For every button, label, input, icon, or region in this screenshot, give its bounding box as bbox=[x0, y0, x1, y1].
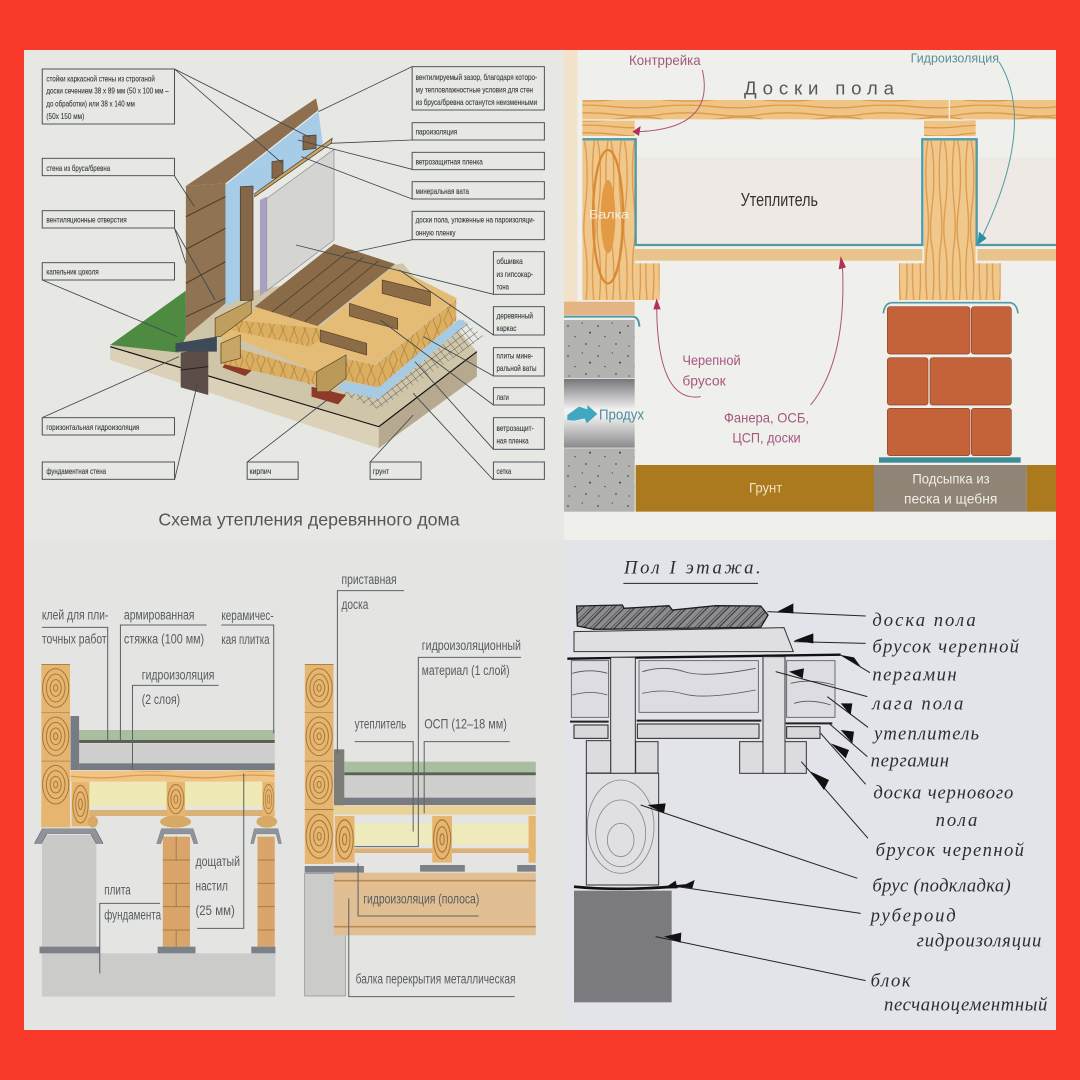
labels: right section: ОСП (12–18 мм) bbox=[424, 716, 507, 731]
label: vapor barrier: пароизоляция bbox=[416, 127, 457, 137]
foundation wall bbox=[176, 337, 217, 395]
left section bbox=[34, 664, 282, 997]
labels: hand-written: брус (подкладка) bbox=[872, 876, 1011, 897]
sand and gravel bed bbox=[874, 465, 1027, 512]
right section bbox=[305, 664, 536, 996]
labels: right section: приставная bbox=[342, 571, 397, 587]
label: floor boards bbox=[412, 211, 544, 240]
insulation bbox=[636, 157, 1056, 246]
insulation cells bbox=[571, 661, 835, 717]
label: foundation wall: фундаментная стена bbox=[46, 466, 106, 476]
foundation left bbox=[34, 828, 282, 997]
labels: hand-written: гидроизоляции bbox=[917, 931, 1041, 952]
beams bbox=[582, 141, 976, 300]
label: vapor barrier bbox=[412, 123, 544, 140]
cranial beam plank bbox=[574, 628, 793, 652]
leader arrows bbox=[641, 603, 870, 981]
pier waterproofing bbox=[879, 303, 1021, 463]
floor boards bbox=[582, 100, 1056, 119]
gypsum sheathing bbox=[260, 149, 334, 296]
label: wooden frame bbox=[493, 307, 544, 335]
labels: left section: керамичес- bbox=[221, 607, 274, 623]
label: brick: кирпич bbox=[250, 466, 271, 476]
label: insulation: Утеплитель bbox=[741, 189, 818, 210]
soil: Грунт bbox=[749, 480, 783, 496]
labels: hand-written: песчаноцементный bbox=[884, 995, 1048, 1016]
labels: right section: материал (1 слой) bbox=[422, 662, 510, 678]
label: horizontal waterproofing bbox=[42, 418, 175, 435]
label: ventilated gap: му тепловлажностные условия для стен bbox=[416, 85, 533, 95]
label: gypsum sheathing: тона bbox=[497, 281, 509, 291]
labels: right section: гидроизоляция (полоса) bbox=[363, 891, 479, 906]
mineral wool block bbox=[220, 267, 457, 387]
label: vents bbox=[42, 211, 175, 228]
label: mineral wool slabs: плиты мине- bbox=[497, 351, 533, 361]
label: drip edge: капельник цоколя bbox=[46, 266, 99, 276]
bricks bbox=[222, 360, 346, 404]
label: cranial bar with arrow: Черепной bbox=[682, 352, 741, 368]
counter rails bbox=[582, 121, 976, 136]
ground slab bbox=[110, 263, 477, 448]
parchment line top bbox=[567, 655, 841, 659]
labels: left section: (2 слоя) bbox=[142, 691, 180, 707]
label: mineral wool slabs bbox=[493, 348, 544, 376]
heading: floor boards: Доски пола bbox=[744, 77, 895, 98]
label: plywood OSB with arrow bbox=[724, 256, 846, 446]
panel: insulation scheme of a wooden house bbox=[24, 50, 564, 540]
labels: hand-written: рубероид bbox=[869, 906, 956, 927]
floor boards bbox=[255, 244, 395, 326]
labels: hand-written: пергамин bbox=[872, 665, 957, 686]
wall edge strip bbox=[564, 50, 577, 303]
label: log wall bbox=[42, 158, 175, 176]
joists bbox=[611, 657, 785, 773]
blue wall membrane bbox=[225, 112, 323, 307]
label: floor boards: доски пола, уложенные на пароизоляци- bbox=[416, 215, 535, 225]
vent: Продух bbox=[599, 407, 645, 423]
label: mineral wool: минеральная вата bbox=[416, 186, 469, 196]
heading: scheme title: Схема утепления деревянного дома bbox=[158, 510, 460, 529]
log wall right bbox=[305, 664, 334, 864]
sand and gravel bed: песка и щебня bbox=[904, 490, 997, 506]
label: wooden frame: каркас bbox=[497, 323, 517, 333]
label: waterproofing with arrow bbox=[911, 51, 1014, 245]
leader lines bbox=[42, 67, 493, 480]
labels: right section: утеплитель bbox=[355, 716, 406, 731]
grass bbox=[110, 291, 186, 353]
label: drip edge bbox=[42, 263, 175, 280]
labels: hand-written: блок bbox=[871, 971, 911, 992]
label: wind film: ная пленка bbox=[497, 435, 529, 445]
label: wall studs bbox=[42, 69, 175, 124]
plank subfloor bbox=[635, 249, 1056, 261]
soil bbox=[636, 465, 1056, 512]
labels: left section: точных работ bbox=[42, 631, 107, 646]
label: plywood OSB with arrow: ЦСП, доски bbox=[732, 430, 801, 446]
label: gypsum sheathing: обшивка bbox=[497, 256, 523, 266]
label: ventilated gap bbox=[412, 67, 544, 110]
label: mineral wool bbox=[412, 182, 544, 199]
labels: left section: (25 мм) bbox=[196, 902, 235, 918]
label: soil bbox=[370, 462, 421, 479]
labels: right section: балка перекрытия металлическая bbox=[356, 971, 515, 986]
joists and insulation left bbox=[72, 782, 277, 828]
mesh bbox=[341, 320, 484, 409]
label: plywood OSB with arrow: Фанера, ОСБ, bbox=[724, 409, 809, 425]
sand and gravel bed: Подсыпка из bbox=[912, 470, 990, 486]
label: wall studs: стойки каркасной стены из строганой bbox=[46, 74, 155, 84]
label: cranial bar with arrow: брусок bbox=[682, 372, 727, 388]
label: wooden frame: деревянный bbox=[497, 311, 533, 321]
labels: hand-written: доска пола bbox=[872, 610, 976, 631]
wind membrane bbox=[337, 319, 468, 399]
labels: hand-written: брусок черепной bbox=[876, 840, 1025, 861]
panel: floor cross-section with beams bbox=[564, 50, 1056, 540]
label: mineral wool slabs: ральной ваты bbox=[497, 363, 536, 373]
wall studs bbox=[240, 135, 332, 301]
tile layers left bbox=[70, 716, 275, 782]
label: joists: лаги bbox=[497, 392, 509, 402]
labels: right section bbox=[342, 571, 521, 986]
vent bbox=[564, 379, 645, 448]
cranial bars bbox=[635, 263, 1001, 300]
labels: left section: фундамента bbox=[104, 907, 161, 922]
labels: hand-written: пола bbox=[936, 810, 977, 831]
hatched floor boards bbox=[577, 605, 768, 629]
label: windproof film bbox=[412, 152, 544, 170]
tile layers right bbox=[334, 749, 536, 815]
metal beam and foundation right bbox=[305, 866, 536, 996]
label: windproof film: ветрозащитная пленка bbox=[416, 156, 483, 166]
label: floor boards: онную пленку bbox=[416, 227, 456, 237]
labels: left section: плита bbox=[104, 882, 131, 898]
label: counter rail with arrow bbox=[629, 52, 704, 136]
labels: hand-written: доска чернового bbox=[873, 782, 1013, 803]
label: soil: грунт bbox=[373, 466, 389, 476]
labels: right section: доска bbox=[342, 596, 369, 612]
label: waterproofing with arrow: Гидроизоляция bbox=[911, 51, 999, 66]
labels: hand-written: брусок черепной bbox=[872, 637, 1020, 658]
wooden frame bbox=[215, 280, 430, 392]
label: mesh bbox=[493, 462, 544, 479]
leader lines bbox=[42, 591, 521, 997]
joists and insulation right bbox=[335, 816, 536, 872]
label: joists bbox=[493, 388, 544, 405]
labels: hand-written: утеплитель bbox=[872, 723, 979, 744]
label: horizontal waterproofing: горизонтальная гидроизоляция bbox=[46, 422, 140, 432]
labels: left section: кая плитка bbox=[221, 631, 270, 647]
label: mesh: сетка bbox=[497, 466, 511, 476]
labels: hand-written bbox=[869, 610, 1048, 1016]
label: wall studs: до обработки) или 38 x 140 мм bbox=[46, 98, 135, 108]
labels: left section: стяжка (100 мм) bbox=[124, 631, 204, 646]
label: vents: вентиляционные отверстия bbox=[46, 215, 127, 225]
waterproofing roll bbox=[574, 885, 692, 889]
label: ventilated gap: вентилируемый зазор, благодаря которо- bbox=[416, 72, 537, 82]
log wall bbox=[186, 98, 318, 337]
rough boards and lower parchment bbox=[570, 721, 832, 738]
sand cement block bbox=[574, 891, 672, 1002]
panel: hand-drawn first floor section bbox=[564, 540, 1056, 1030]
labels: hand-written: пергамин bbox=[871, 751, 949, 772]
panel: cross-sections with screed and tile bbox=[24, 540, 564, 1030]
labels: left section: гидроизоляция bbox=[142, 667, 214, 682]
label: cranial bar with arrow bbox=[653, 298, 741, 397]
label: gypsum sheathing bbox=[493, 252, 544, 294]
foundation left bbox=[564, 302, 639, 512]
labels: left section: армированная bbox=[124, 607, 194, 622]
labels: hand-written: лага пола bbox=[871, 693, 963, 714]
timber pad bbox=[586, 773, 659, 885]
log wall left bbox=[41, 664, 70, 827]
labels: right section: гидроизоляционный bbox=[422, 637, 521, 653]
label: wind film: ветрозащит- bbox=[497, 423, 534, 433]
cranial bars bbox=[586, 741, 806, 773]
waterproofing lines bbox=[582, 139, 1056, 245]
label: log wall: стена из бруса/бревна bbox=[46, 163, 110, 173]
label: foundation wall bbox=[42, 462, 175, 479]
labels: left section: настил bbox=[196, 878, 228, 894]
label: wall studs: (50x 150 мм) bbox=[46, 111, 84, 121]
heading: first floor: Пол I этажа. bbox=[623, 557, 761, 578]
label: beam: Балка bbox=[589, 207, 629, 221]
label: brick bbox=[247, 462, 298, 479]
labels: left section: дощатый bbox=[196, 853, 240, 869]
label: wind film bbox=[493, 418, 544, 449]
labels: left section: клей для пли- bbox=[42, 607, 108, 622]
label: counter rail with arrow: Контррейка bbox=[629, 52, 701, 68]
label: gypsum sheathing: из гипсокар- bbox=[497, 269, 533, 279]
brick pier bbox=[887, 307, 1011, 456]
label: ventilated gap: из бруса/бревна останутся неизменными bbox=[416, 97, 537, 107]
labels: left section bbox=[42, 607, 274, 922]
label: wall studs: доски сечением 38 x 89 мм (50 x 100 мм – bbox=[46, 86, 169, 96]
